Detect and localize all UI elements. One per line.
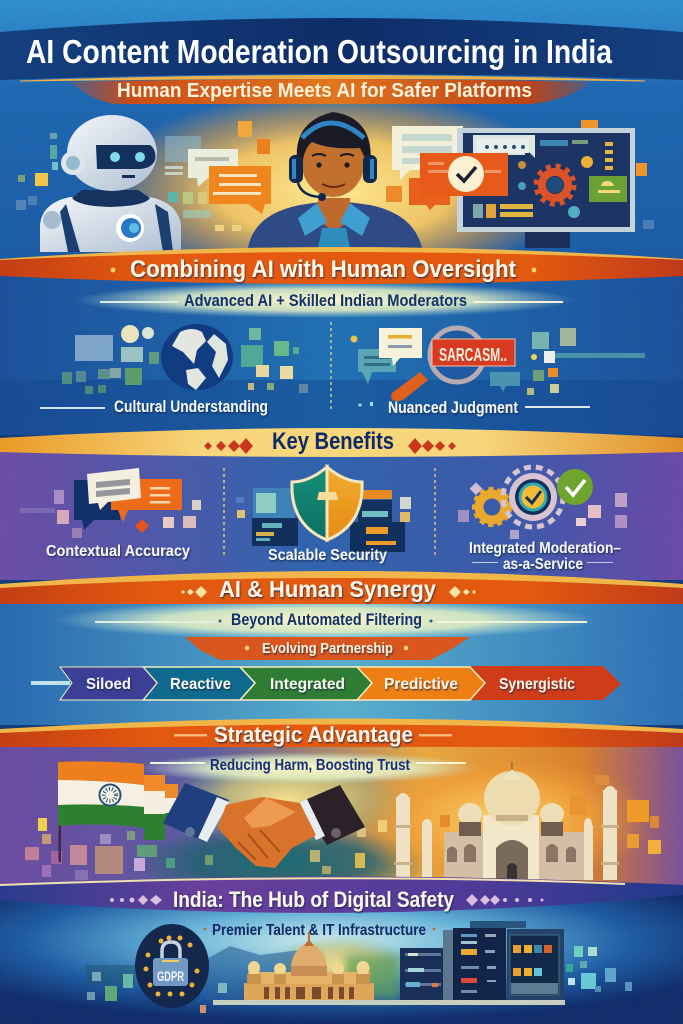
icon: contextual chat bubbles: [20, 468, 201, 538]
nuanced pixels: [350, 328, 645, 407]
banner: AI and human synergy: [0, 571, 683, 604]
stage: reactive: [143, 667, 255, 700]
icon: palace: [244, 932, 374, 1000]
stage: synergistic: Synergistic: [499, 676, 575, 693]
label: integrated moderation as a service: as-a-Service: [503, 556, 583, 573]
icon: chat bubbles left: [188, 149, 271, 214]
icon: globe: [161, 324, 233, 390]
stage: predictive: [352, 667, 485, 700]
divider: [330, 322, 332, 412]
chevron process: [60, 666, 621, 700]
heading: Combining AI with Human Oversight: [130, 256, 516, 283]
eu stars: [144, 936, 200, 996]
icon: approved message: [409, 153, 508, 210]
ornaments right: [449, 586, 476, 598]
hero pixels: [16, 120, 654, 231]
stage: siloed: [60, 667, 157, 700]
plinth: [213, 1000, 565, 1005]
banner: evolving partnership: [185, 637, 470, 660]
banner: strategic advantage: [0, 718, 683, 747]
pixel mosaic right: [440, 775, 661, 854]
icon: robot: [40, 115, 181, 252]
diamonds right: [408, 438, 456, 454]
sarcasm label: SARCASM..: [439, 345, 507, 365]
side domes: [458, 803, 564, 825]
city skyline backdrop: [85, 935, 410, 1000]
banner: combining AI: [0, 247, 683, 284]
icon: security shield and servers: [236, 467, 411, 552]
arrow lead-in: [31, 681, 70, 685]
title banner: [0, 18, 683, 81]
label: nuanced judgment: Nuanced Judgment: [388, 398, 518, 417]
diamonds left: [204, 438, 253, 454]
heading: India: The Hub of Digital Safety: [173, 887, 454, 912]
panel: synergy background: [0, 590, 683, 725]
stage: siloed: Siloed: [86, 676, 131, 693]
icon: taj mahal: [394, 762, 619, 880]
heading: Strategic Advantage: [214, 722, 413, 747]
panel: hub background: [0, 895, 683, 1024]
label: scalable security: Scalable Security: [268, 547, 387, 564]
label: integrated moderation as a service: Integrated Moderation–: [469, 540, 621, 557]
subheading: advanced AI: Advanced AI + Skilled Indian Moderators: [184, 292, 467, 310]
arches: [264, 987, 354, 999]
stage: synergistic: [470, 666, 621, 700]
dividers: [224, 468, 435, 558]
subheading: reducing harm: Reducing Harm, Boosting Trust: [210, 757, 411, 774]
icon: sarcasm magnifier: [358, 328, 520, 401]
icon: GDPR lock: [135, 924, 209, 1008]
panel: strategic background: [0, 735, 683, 900]
icon: india flag: [58, 761, 178, 862]
icon: data center servers: [400, 921, 564, 1001]
panel: combining AI background: [0, 270, 683, 435]
label: cultural understanding: Cultural Understanding: [114, 398, 268, 416]
icon: moderation gears: [458, 467, 627, 539]
diamonds right: [466, 894, 544, 906]
banner: india hub: [0, 876, 683, 913]
panel: benefits background: [0, 445, 683, 580]
subheading: beyond automated filtering: Beyond Automated Filtering: [231, 611, 422, 629]
gear: [536, 166, 574, 204]
banner: evolving partnership: Evolving Partnership: [262, 640, 393, 657]
banner: key benefits: [0, 428, 683, 457]
icon: cultural squares: [62, 325, 308, 394]
stage: integrated: [240, 667, 372, 700]
heading: Key Benefits: [272, 428, 394, 455]
sarcasm label: [432, 339, 515, 366]
stage: reactive: Reactive: [170, 676, 231, 693]
label: integrated moderation as a service: [469, 540, 621, 573]
icon: chat bubbles right: [392, 126, 463, 180]
pixel mosaic hub: [87, 946, 632, 1013]
heading: AI & Human Synergy: [219, 576, 436, 602]
subtitle banner: [70, 79, 590, 104]
diamonds left: [110, 895, 162, 905]
pixel mosaic left: [25, 818, 387, 880]
icon: support agent: [248, 112, 422, 248]
subheading: premier talent: Premier Talent & IT Infrastructure: [212, 922, 426, 939]
ornaments left: [181, 586, 207, 598]
subtitle text: Human Expertise Meets AI for Safer Platforms: [117, 80, 532, 102]
icon: GDPR lock: GDPR: [157, 969, 184, 984]
label: contextual accuracy: Contextual Accuracy: [46, 543, 190, 560]
icon: handshake: [163, 783, 365, 868]
stage: integrated: Integrated: [270, 676, 345, 693]
hero background: [0, 0, 683, 290]
stage: predictive: Predictive: [384, 676, 458, 693]
subheading: beyond automated filtering: [95, 611, 587, 629]
icon: dashboard monitor: [457, 128, 635, 248]
minarets: [396, 786, 617, 880]
small domes: [248, 961, 370, 975]
